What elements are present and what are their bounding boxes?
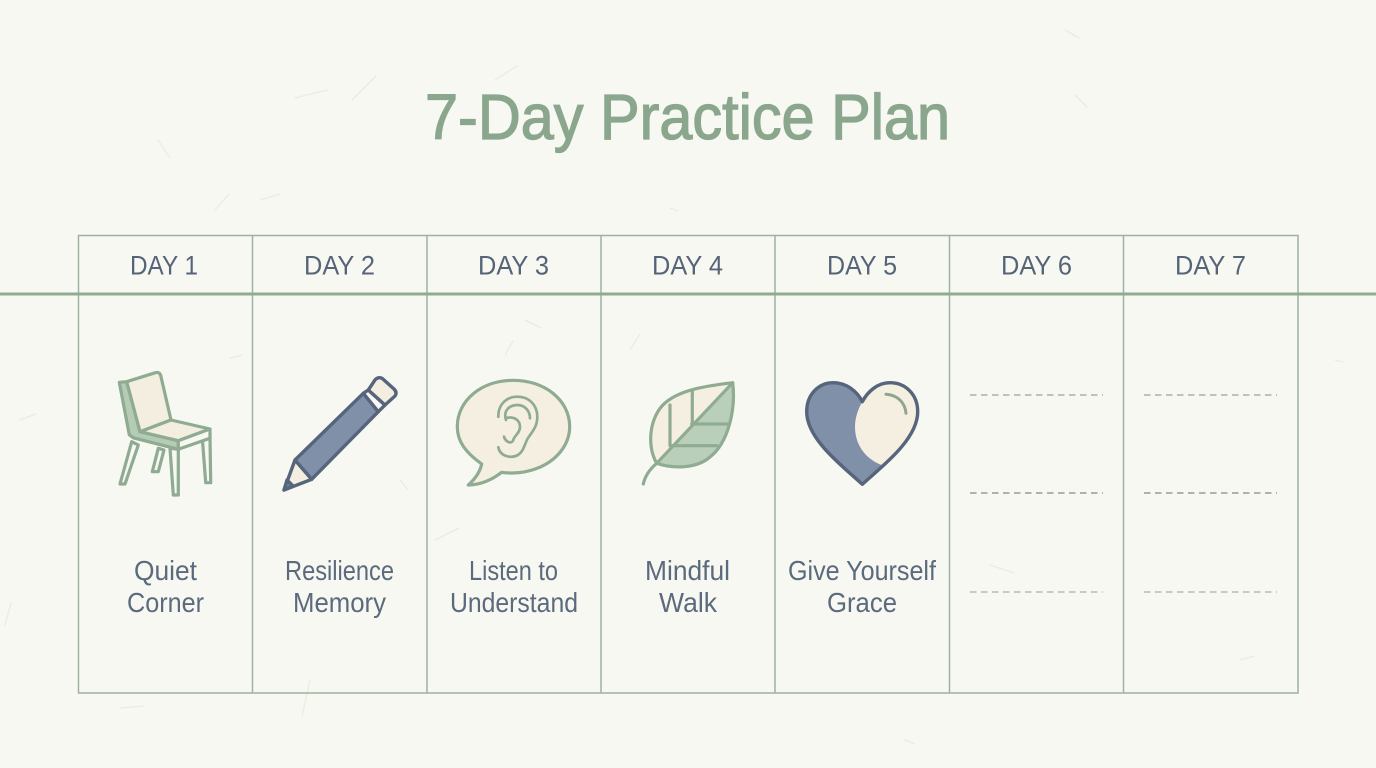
day headers: DAY 6 [1001, 250, 1072, 280]
activity labels [127, 555, 936, 618]
title: 7-Day Practice Plan [425, 81, 950, 153]
activity labels: Mindful [645, 555, 730, 586]
activity labels: Corner [127, 587, 204, 618]
activity labels: Walk [659, 587, 718, 618]
activity labels: Listen to [469, 555, 558, 586]
activity labels: Quiet [134, 555, 197, 586]
day headers: DAY 3 [478, 250, 549, 280]
activity labels: Grace [827, 587, 897, 618]
day headers: DAY 1 [130, 250, 198, 280]
activity labels: Give Yourself [788, 555, 936, 586]
icon: heart [807, 383, 918, 484]
empty writing lines: day 7 [1144, 395, 1277, 592]
icon: ear in speech bubble [457, 380, 570, 485]
day headers: DAY 4 [652, 250, 723, 280]
icon: pencil [284, 378, 396, 490]
day headers [130, 250, 1246, 280]
icon: leaf [643, 383, 733, 484]
day headers: DAY 5 [827, 250, 897, 280]
activity labels: Memory [293, 587, 386, 618]
activity labels: Resilience [285, 555, 394, 586]
day headers: DAY 2 [304, 250, 375, 280]
activity labels: Understand [450, 587, 578, 618]
empty writing lines: day 6 [970, 395, 1103, 592]
calendar grid [0, 235, 1376, 693]
icon: chair [119, 372, 211, 495]
day headers: DAY 7 [1175, 250, 1246, 280]
